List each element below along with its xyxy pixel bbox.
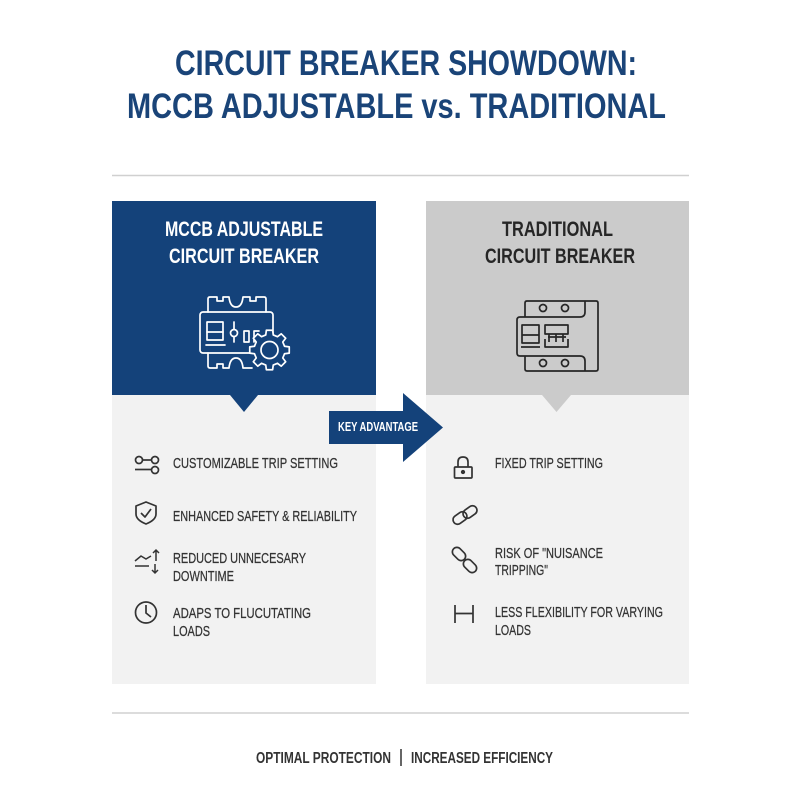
text: less flexibility [495, 604, 663, 639]
panel: MCCB adjustable [112, 201, 376, 684]
text: nuisance tripping [495, 545, 603, 579]
arrow: key advantage: KEY ADVANTAGE [338, 419, 418, 434]
panel header: MCCB adjustable: CIRCUIT BREAKER [169, 245, 319, 268]
panel: traditional [426, 201, 689, 684]
text: reduced downtime: DOWNTIME [173, 568, 234, 585]
text: less flexibility: LESS FLEXIBILITY FOR VARYING [495, 604, 663, 621]
icon: adjustable breaker with gear [200, 297, 289, 370]
arrow: key advantage [329, 393, 443, 462]
icon: sliders [135, 456, 158, 474]
panel header: traditional: TRADITIONAL [502, 218, 613, 241]
title [127, 44, 666, 126]
text: fixed trip setting: FIXED TRIP SETTING [495, 455, 603, 472]
text: reduced downtime [173, 550, 306, 585]
text: fluctuating loads [173, 605, 311, 640]
icon: traditional breaker [517, 301, 598, 371]
icon: lock [454, 457, 472, 478]
text: nuisance tripping: RISK OF "NUISANCE [495, 545, 603, 562]
icon: chain link [451, 504, 479, 526]
feature list: MCCB [135, 455, 357, 640]
panel header: traditional [426, 201, 689, 412]
text: enhanced safety: ENHANCED SAFETY & RELIABILITY [173, 508, 357, 525]
panel header: traditional: CIRCUIT BREAKER [485, 245, 635, 268]
title: CIRCUIT BREAKER SHOWDOWN: [175, 44, 637, 83]
panel header: MCCB adjustable [112, 201, 376, 412]
footer tagline [256, 749, 553, 767]
text: less flexibility: LOADS [495, 622, 531, 639]
icon: clock [136, 602, 156, 623]
icon: broken chain [451, 546, 478, 574]
icon: shield check [136, 502, 156, 524]
icon: downtime arrows [135, 550, 159, 573]
text: nuisance tripping: TRIPPING" [495, 562, 548, 579]
title: MCCB ADJUSTABLE vs. TRADITIONAL [127, 87, 666, 126]
feature list: traditional [451, 455, 663, 639]
text: fluctuating loads: LOADS [173, 623, 210, 640]
footer tagline: OPTIMAL PROTECTION [256, 750, 391, 767]
icon: fixed width [455, 605, 473, 623]
text: fluctuating loads: ADAPS TO FLUCUTATING [173, 605, 311, 622]
text: customizable trip setting: CUSTOMIZABLE TRIP SETTING [173, 455, 338, 472]
panel header: MCCB adjustable: MCCB ADJUSTABLE [165, 218, 323, 241]
text: reduced downtime: REDUCED UNNECESARY [173, 550, 306, 567]
footer tagline: INCREASED EFFICIENCY [411, 750, 553, 767]
